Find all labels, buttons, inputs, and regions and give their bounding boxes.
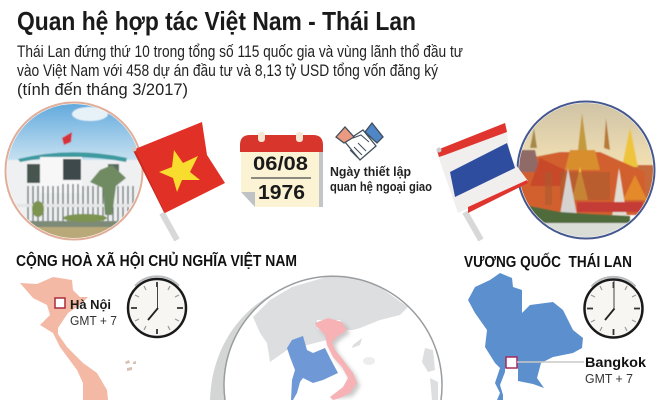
- label: Bangkok: Bangkok: [585, 355, 647, 370]
- title: Quan hệ hợp tác Việt Nam - Thái Lan: [17, 6, 416, 36]
- label: Hanoi: GMT + 7: [70, 314, 117, 328]
- Vietnam on globe: [315, 318, 360, 400]
- photo: Vietnam National Assembly building: [5, 102, 143, 240]
- label: Bangkok: GMT + 7: [585, 372, 633, 386]
- islands: [125, 360, 136, 371]
- clock: Vietnam: [128, 276, 186, 337]
- map: Vietnam: [20, 277, 108, 400]
- flag: Vietnam: [132, 122, 225, 240]
- caption: date of diplomatic relations: quan hệ ngoại giao: [330, 180, 432, 194]
- Thailand on globe: [287, 336, 338, 400]
- heading: Thailand: VƯƠNG QUỐC THÁI LAN: [464, 251, 632, 271]
- clock: Thailand: [584, 277, 642, 338]
- intro text: (tính đến tháng 3/2017): [17, 80, 188, 99]
- icon: handshake: [336, 123, 383, 160]
- globe map: [210, 275, 442, 400]
- calendar: 06/08 1976: [240, 132, 323, 207]
- leader line: [517, 361, 584, 363]
- label: Hanoi: Hà Nội: [70, 298, 111, 312]
- intro text: [17, 43, 463, 99]
- marker: Bangkok: [506, 357, 517, 368]
- caption: date of diplomatic relations: [330, 165, 432, 194]
- date: 06/08: [253, 154, 308, 175]
- marker: Hanoi: [55, 298, 65, 308]
- label: Bangkok: [585, 355, 647, 386]
- intro text: vào Việt Nam với 458 dự án đầu tư và 8,13 tỷ USD tổng vốn đăng ký: [17, 62, 439, 80]
- flag: Thailand: [436, 123, 528, 240]
- photo: Thai Grand Palace: [517, 102, 655, 240]
- caption: date of diplomatic relations: Ngày thiết lập: [330, 165, 411, 179]
- year: 1976: [258, 182, 305, 204]
- label: Hanoi: [70, 298, 117, 328]
- intro text: Thái Lan đứng thứ 10 trong tổng số 115 quốc gia và vùng lãnh thổ đầu tư: [17, 43, 463, 61]
- heading: Vietnam: CỘNG HOÀ XÃ HỘI CHỦ NGHĨA VIỆT NAM: [16, 250, 297, 270]
- map: Thailand: [468, 273, 583, 400]
